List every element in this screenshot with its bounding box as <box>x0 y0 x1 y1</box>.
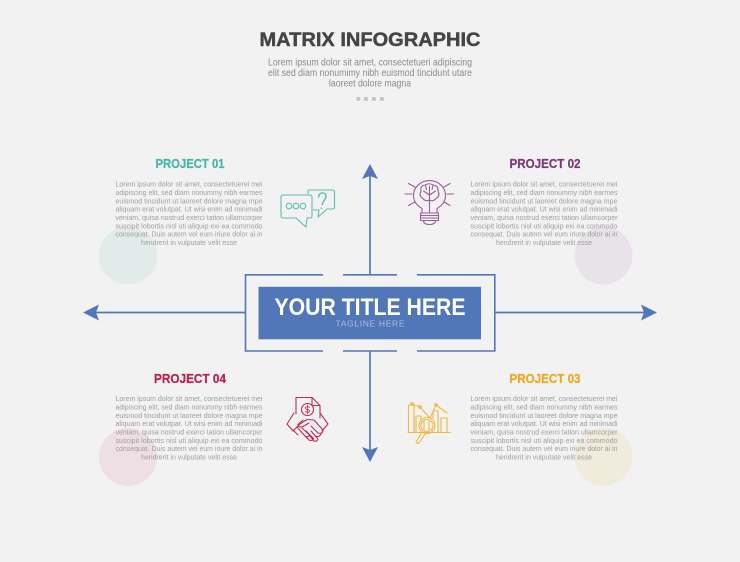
body text: project 01: Lorem ipsum dolor sit amet, consectetuerei mei <box>116 180 263 189</box>
title: MATRIX INFOGRAPHIC <box>260 29 480 51</box>
icon: handshake and money document <box>287 398 328 441</box>
body text: project 04: suscipit lobortis nisl uti aliquip exi ea commodo <box>116 436 262 445</box>
panel: project 02 <box>470 156 618 247</box>
body text: project 04 <box>116 394 263 462</box>
body text: project 01: euismod tincidunt ut laoreet dolore magna mpe <box>116 196 262 205</box>
body text: project 02: adipiscing elit, sed diam nonummy nibh earmes <box>470 188 618 197</box>
body text: project 04: euismod tincidunt ut laoreet dolore magna mpe <box>116 411 262 420</box>
body text: project 03: consequat. Duis autem vel eum iriure dolor ai in <box>470 444 618 453</box>
panel: project 01 <box>116 156 263 247</box>
body text: project 01: hendrerit in vulputate velit esse <box>141 238 237 247</box>
circle: project 04 <box>99 428 157 486</box>
body text: project 02: consequat. Duis autem vel eum iriure dolor ai in <box>470 230 618 239</box>
body text: project 02 <box>470 180 618 247</box>
heading: project 02: PROJECT 02 <box>510 156 580 171</box>
body text: project 03: aliquam erat volutpat. Ut wisi enim ad minimadi <box>470 419 618 428</box>
heading: project 03: PROJECT 03 <box>510 371 580 386</box>
panel: project 04 <box>116 371 263 462</box>
body text: project 01 <box>116 180 263 247</box>
body text: project 02: Lorem ipsum dolor sit amet, consectetuerei mei <box>470 180 618 189</box>
subtitle text block: Lorem ipsum dolor sit amet, consectetueri adipiscing <box>268 58 472 68</box>
body text: project 02: aliquam erat volutpat. Ut wisi enim ad minimadi <box>470 205 618 214</box>
body text: project 01: adipiscing elit, sed diam nonummy nibh earmes <box>116 188 263 197</box>
tagline: TAGLINE HERE <box>336 318 405 328</box>
icon: bar chart with magnifier <box>408 403 450 443</box>
body text: project 04: veniam, quisa nostrud exerci tation ullamcorper <box>116 428 263 436</box>
body text: project 02: euismod tincidunt ut laoreet dolore magna mpe <box>470 196 618 205</box>
header dots <box>356 97 384 101</box>
arrow: up <box>362 164 378 274</box>
body text: project 03: hendrerit in vulputate velit esse <box>496 452 592 462</box>
body text: project 04: aliquam erat volutpat. Ut wisi enim ad minimadi <box>116 419 263 428</box>
panel: project 03 <box>470 371 618 462</box>
subtitle text block: elit sed diam nonumimy nibh euismod tincidunt utare <box>268 68 472 79</box>
circle: project 01 <box>99 226 157 284</box>
body text: project 04: Lorem ipsum dolor sit amet, consectetuerei mei <box>116 394 263 403</box>
subtitle text block <box>268 58 472 90</box>
body text: project 01: veniam, quisa nostrud exerci tation ullamcorper <box>116 213 263 222</box>
body text: project 03: euismod tincidunt ut laoreet dolore magna mpe <box>470 411 618 420</box>
arrow: left <box>83 304 245 320</box>
body text: project 04: adipiscing elit, sed diam nonummy nibh earmes <box>116 402 263 412</box>
body text: project 01: suscipit lobortis nisl uti aliquip exi ea commodo <box>116 221 262 230</box>
circle: project 02 <box>574 226 632 284</box>
body text: project 02: suscipit lobortis nisl uti aliquip exi ea commodo <box>470 221 618 230</box>
arrow: right <box>495 304 657 320</box>
body text: project 02: hendrerit in vulputate velit esse <box>496 238 592 247</box>
subtitle text block: laoreet dolore magna <box>329 78 411 90</box>
body text: project 04: consequat. Duis autem vel eum iriure dolor ai in <box>116 444 262 453</box>
body text: project 02: veniam, quisa nostrud exerci tation ullamcorper <box>470 213 618 222</box>
arrow: down <box>362 351 378 462</box>
body text: project 03: suscipit lobortis nisl uti aliquip exi ea commodo <box>470 436 618 445</box>
body text: project 03: Lorem ipsum dolor sit amet, consectetuerei mei <box>470 394 618 403</box>
body text: project 03: veniam, quisa nostrud exerci tation ullamcorper <box>470 428 618 436</box>
icon: speech bubbles <box>281 190 334 227</box>
body text: project 03: adipiscing elit, sed diam nonummy nibh earmes <box>470 402 618 412</box>
body text: project 03 <box>470 394 618 462</box>
center frame <box>246 275 495 351</box>
heading: project 01: PROJECT 01 <box>156 156 224 171</box>
center title: YOUR TITLE HERE <box>274 294 466 321</box>
body text: project 04: hendrerit in vulputate velit esse <box>141 452 237 462</box>
center title box <box>258 287 481 339</box>
body text: project 01: consequat. Duis autem vel eum iriure dolor ai in <box>116 230 262 239</box>
circle: project 03 <box>574 428 632 486</box>
heading: project 04: PROJECT 04 <box>154 371 227 386</box>
icon: light bulb with brain <box>405 181 454 224</box>
body text: project 01: aliquam erat volutpat. Ut wisi enim ad minimadi <box>116 205 263 214</box>
